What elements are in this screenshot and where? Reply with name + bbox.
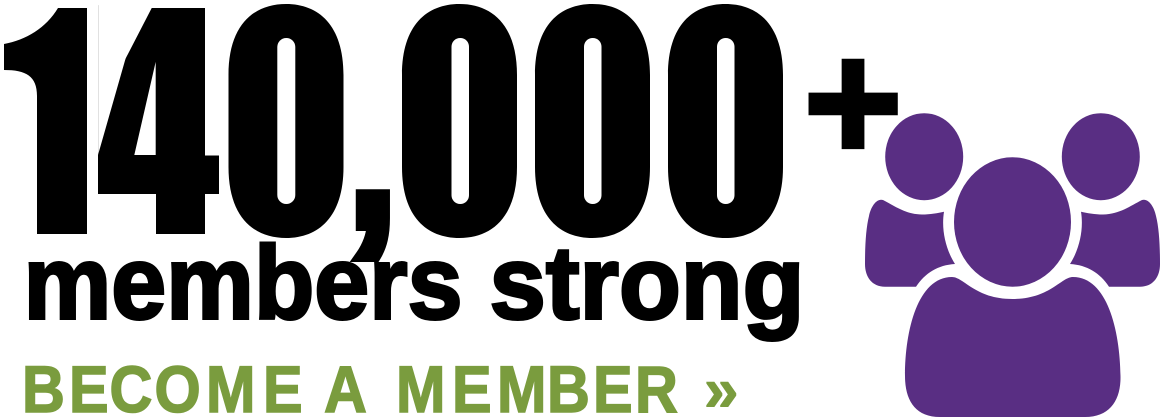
headline number: 140,000: , — [349, 45, 396, 268]
icon: right member — [1062, 113, 1160, 287]
icon: group of three members — [865, 113, 1160, 417]
subheading: members strong: members — [24, 226, 462, 342]
plus sign: + — [803, 8, 903, 198]
headline number: 140,000 — [0, 0, 791, 307]
icon: left member — [865, 113, 963, 287]
subheading: members strong — [24, 226, 804, 342]
subheading: members strong: strong — [490, 226, 804, 342]
icon: centre member — [905, 157, 1121, 417]
